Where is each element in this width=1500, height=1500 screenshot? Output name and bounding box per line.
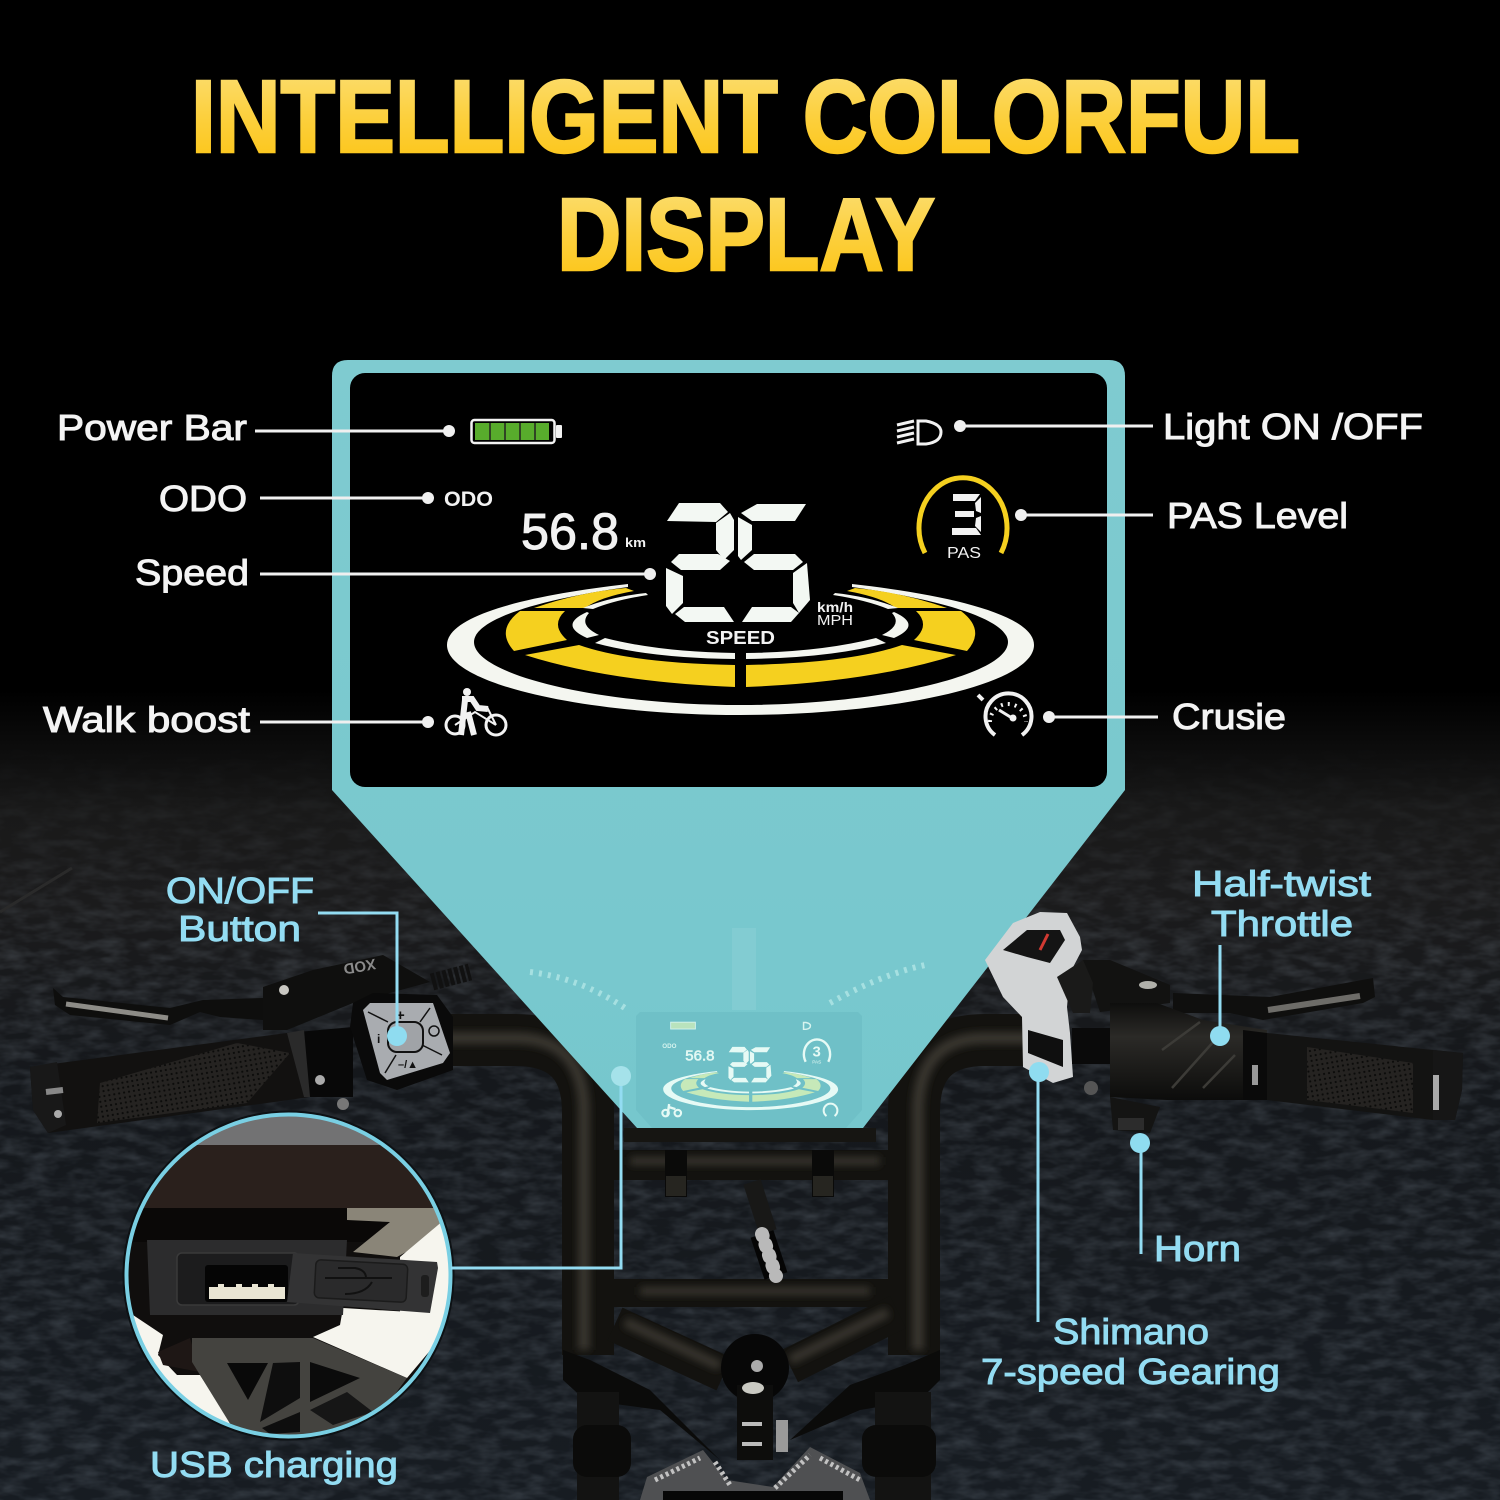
- mini display on handlebar: ODO: [662, 1043, 677, 1050]
- icon: battery power bar: [472, 420, 562, 443]
- label: ON/OFF Button: [166, 870, 407, 1046]
- title: INTELLIGENT COLORFUL: [191, 59, 1300, 174]
- label: Half-twist Throttle: Half-twist: [1192, 863, 1371, 904]
- label: Horn: [1130, 1133, 1241, 1269]
- left handlebar controls: [30, 955, 470, 1133]
- label: Walk boost: Walk boost: [43, 699, 250, 740]
- label: ODO: ODO: [159, 478, 247, 519]
- PAS level indicator: PAS: [947, 545, 981, 562]
- title: [191, 59, 1300, 292]
- label: Shimano 7-speed Gearing: Shimano: [1053, 1311, 1209, 1352]
- label: Power Bar: [57, 407, 455, 448]
- left handlebar controls: i: [377, 1032, 380, 1046]
- mini display on handlebar: [636, 1012, 862, 1128]
- label: USB charging: [150, 1066, 631, 1485]
- speed unit labels: km/h: [817, 599, 853, 615]
- ODO text: ODO: [444, 488, 493, 511]
- main display readouts: [444, 420, 1034, 735]
- speed digits 25: [666, 503, 810, 622]
- label: Horn: Horn: [1154, 1228, 1241, 1269]
- label: Walk boost: [43, 699, 434, 740]
- label: Light ON/OFF: Light ON /OFF: [1163, 406, 1423, 447]
- left handlebar controls: +: [396, 1007, 405, 1024]
- label: Crusie: Crusie: [1172, 696, 1286, 737]
- speed unit labels: SPEED: [706, 628, 775, 648]
- mini display on handlebar: 56.8: [685, 1048, 714, 1065]
- label: Shimano 7-speed Gearing: 7-speed Gearing: [981, 1351, 1280, 1392]
- label: Speed: Speed: [135, 552, 249, 593]
- panel: teal callout with display: [332, 360, 1125, 1128]
- label: ODO: [159, 478, 434, 519]
- icon: cruise speedometer: [978, 693, 1032, 735]
- title: DISPLAY: [557, 177, 935, 292]
- label: ON/OFF Button: ON/OFF: [166, 870, 314, 911]
- speed unit labels: [706, 599, 853, 648]
- mini display on handlebar: 3: [813, 1044, 821, 1060]
- speed unit labels: MPH: [817, 612, 853, 629]
- left handlebar controls: XOD: [342, 955, 377, 977]
- bike frame and handlebar: [440, 1038, 1040, 1500]
- left handlebar controls: –/⁠▲: [398, 1059, 418, 1071]
- label: Half-twist Throttle: Throttle: [1211, 903, 1353, 944]
- label: Speed: [135, 552, 656, 593]
- icon: walk boost: [446, 688, 506, 735]
- label: PAS Level: [1015, 495, 1348, 536]
- icon: headlight: [897, 421, 941, 444]
- label: PAS Level: PAS Level: [1167, 495, 1348, 536]
- label: USB charging: USB charging: [150, 1444, 398, 1485]
- trip distance: 56.8: [521, 503, 619, 560]
- speed gauge: [447, 584, 1034, 715]
- PAS level indicator: [919, 478, 1007, 562]
- label: ON/OFF Button: Button: [178, 908, 301, 949]
- mini display on handlebar: PAS: [812, 1059, 821, 1065]
- right handlebar controls: [985, 912, 1463, 1133]
- label: Crusie: [1043, 696, 1286, 737]
- label: Shimano 7-speed Gearing: [981, 1062, 1280, 1392]
- trip distance: km: [625, 535, 646, 550]
- background: dark road: [0, 729, 1500, 1500]
- label: Power Bar: Power Bar: [57, 407, 247, 448]
- label: Light ON/OFF: [954, 406, 1423, 447]
- label: Half-twist Throttle: [1192, 863, 1371, 1046]
- callout: USB charging magnifier: [120, 1105, 460, 1445]
